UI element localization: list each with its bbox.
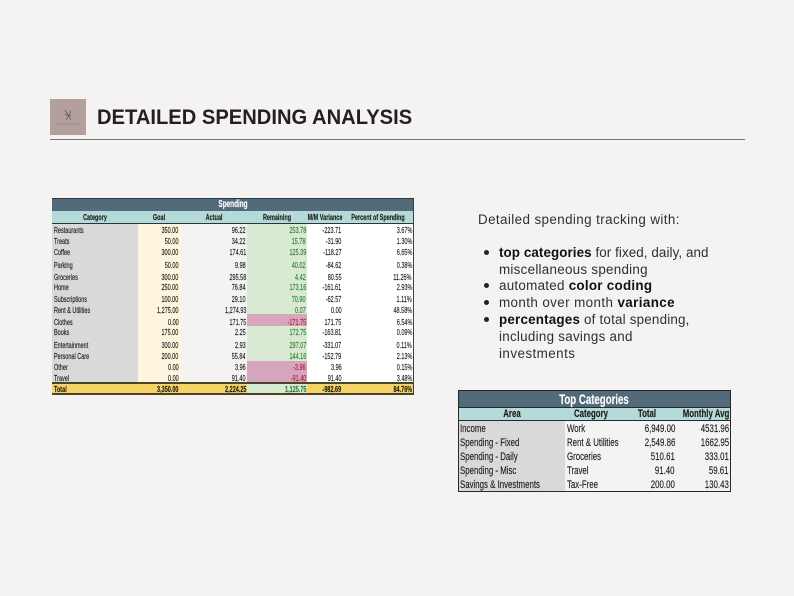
rows: 1662.95: [701, 437, 729, 449]
bullet list: top categories for fixed, daily, and: [499, 245, 709, 260]
bullet list: miscellaneous spending: [499, 262, 648, 277]
rows: Tax-Free: [567, 479, 598, 491]
column fills: [52, 223, 414, 383]
table title bar: Top Categories: [559, 391, 629, 407]
bullet list: investments: [499, 346, 575, 361]
rows: 253.78: [289, 225, 306, 235]
table title bar: [458, 390, 731, 408]
bullet list: percentages of total spending,: [499, 312, 690, 327]
rows: 250.00: [162, 282, 178, 292]
rows: -118.27: [323, 247, 342, 257]
panel: top categories table: [458, 390, 731, 492]
column headers: Total: [638, 408, 656, 420]
rows: 1.30%: [396, 236, 412, 246]
intro sentence: Detailed spending tracking with:: [478, 212, 680, 227]
rows: 48.58%: [393, 305, 412, 315]
total row: [52, 382, 414, 395]
rows: -62.57: [326, 294, 342, 304]
rows: 100.00: [162, 294, 178, 304]
rows: 29.10: [232, 294, 246, 304]
rows: 297.07: [289, 340, 306, 350]
rows: Clothes: [54, 316, 73, 326]
column headers: Percent of Spending: [351, 212, 405, 222]
rows: 4531.96: [701, 423, 729, 435]
rows: -163.81: [323, 327, 342, 337]
rows: 91.40: [328, 373, 342, 383]
rows: Work: [567, 423, 585, 435]
rows: -161.61: [323, 282, 342, 292]
rows: 4.42: [295, 272, 306, 282]
rows: 91.40: [655, 465, 675, 477]
rows: 0.07: [295, 305, 306, 315]
column headers: M/M Variance: [308, 212, 342, 222]
rows: 130.43: [705, 479, 729, 491]
rows: [54, 225, 412, 383]
rows: 3.67%: [396, 225, 412, 235]
rows: -3.96: [293, 362, 306, 372]
rows: 0.11%: [397, 340, 412, 350]
column headers: Monthly Avg: [683, 408, 729, 420]
panel: spending table: [52, 198, 414, 395]
rows: Other: [54, 362, 68, 372]
bullet list: month over month variance: [499, 295, 675, 310]
rows: 2.93: [235, 340, 246, 350]
rows: -171.75: [287, 316, 306, 326]
rows: Savings & Investments: [460, 479, 540, 491]
rows: Parking: [54, 260, 73, 270]
rows: Books: [54, 327, 69, 337]
rows: 350.00: [162, 225, 178, 235]
column headers: Category: [83, 212, 107, 222]
column headers: Area: [503, 408, 521, 420]
rows: -223.71: [323, 225, 342, 235]
rows: 0.15%: [396, 362, 412, 372]
column headers: [458, 408, 731, 421]
rows: 0.00: [331, 305, 342, 315]
rows: 2.13%: [396, 351, 412, 361]
rows: 6,949.00: [644, 423, 675, 435]
total row: 84.76%: [393, 384, 412, 394]
total row: 1,125.75: [285, 384, 306, 394]
rows: Groceries: [54, 272, 78, 282]
rows: 300.00: [162, 272, 178, 282]
rows: 40.02: [292, 260, 306, 270]
rows: 144.16: [289, 351, 306, 361]
rows: Groceries: [567, 451, 601, 463]
rows: 3.48%: [396, 373, 412, 383]
rows: -331.07: [323, 340, 342, 350]
rows: 6.54%: [396, 316, 412, 326]
table title bar: [52, 198, 414, 211]
column headers: Category: [574, 408, 608, 420]
bullet list: including savings and: [499, 329, 633, 344]
rows: 0.09%: [396, 327, 412, 337]
logo: [50, 99, 86, 135]
rows: 300.00: [162, 340, 178, 350]
rows: Treats: [54, 236, 69, 246]
rows: 50.00: [165, 260, 178, 270]
rows: 96.22: [232, 225, 246, 235]
rows: Travel: [567, 465, 589, 477]
rows: 2,549.86: [644, 437, 675, 449]
area column fill: [459, 421, 565, 491]
bullet list: [484, 245, 709, 361]
rows: 172.75: [289, 327, 306, 337]
rows: 174.61: [229, 247, 246, 257]
rows: [460, 423, 729, 491]
rows: 91.40: [232, 373, 246, 383]
rows: Home: [54, 282, 69, 292]
rows: 200.00: [162, 351, 178, 361]
rows: -84.62: [326, 260, 342, 270]
table title bar: Spending: [218, 199, 248, 210]
rows: 15.78: [292, 236, 306, 246]
rows: 50.00: [165, 236, 178, 246]
column headers: Remaining: [263, 212, 291, 222]
rows: Rent & Utilities: [567, 437, 619, 449]
rows: -31.90: [326, 236, 342, 246]
total row: 3,350.00: [157, 384, 178, 394]
rows: 0.38%: [396, 260, 412, 270]
title rule: [50, 139, 745, 140]
column headers: [52, 211, 414, 224]
total row: 2,224.25: [225, 384, 246, 394]
rows: Rent & Utilities: [54, 305, 90, 315]
column headers: Actual: [206, 212, 222, 222]
rows: Entertainment: [54, 340, 88, 350]
rows: 1.11%: [397, 294, 412, 304]
rows: Spending - Fixed: [460, 437, 519, 449]
rows: 300.00: [162, 247, 178, 257]
rows: 6.65%: [396, 247, 412, 257]
rows: 34.22: [232, 236, 246, 246]
rows: 173.16: [289, 282, 306, 292]
rows: 175.00: [162, 327, 178, 337]
rows: 1,275.00: [157, 305, 178, 315]
rows: 9.98: [235, 260, 246, 270]
rows: 171.75: [325, 316, 342, 326]
total row: -982.69: [323, 384, 342, 394]
rows: 125.39: [289, 247, 306, 257]
table right border: [413, 198, 414, 395]
bullet list: automated color coding: [499, 278, 652, 293]
rows: -91.40: [290, 373, 306, 383]
rows: 333.01: [705, 451, 729, 463]
total row: Total: [54, 384, 67, 394]
column headers: Goal: [153, 212, 165, 222]
rows: 200.00: [651, 479, 675, 491]
rows: 80.55: [328, 272, 342, 282]
title: DETAILED SPENDING ANALYSIS: [97, 106, 412, 129]
rows: 171.75: [229, 316, 246, 326]
rows: 2.93%: [396, 282, 412, 292]
text block: description: [478, 212, 709, 361]
rows: Personal Care: [54, 351, 89, 361]
rows: 3.96: [235, 362, 246, 372]
rows: Spending - Daily: [460, 451, 518, 463]
rows: Coffee: [54, 247, 70, 257]
rows: 59.61: [709, 465, 729, 477]
rows: 2.25: [235, 327, 246, 337]
rows: 0.00: [168, 362, 178, 372]
rows: 510.61: [651, 451, 675, 463]
rows: Travel: [54, 373, 69, 383]
rows: -152.79: [323, 351, 342, 361]
rows: 11.26%: [394, 272, 412, 282]
rows: 76.84: [232, 282, 246, 292]
rows: 295.58: [229, 272, 246, 282]
rows: Spending - Misc: [460, 465, 516, 477]
rows: Restaurants: [54, 225, 84, 235]
rows: 1,274.93: [225, 305, 246, 315]
logo mark: [57, 110, 79, 124]
rows: 3.96: [331, 362, 342, 372]
rows: 0.00: [168, 316, 178, 326]
rows: 70.90: [292, 294, 306, 304]
rows: 0.00: [168, 373, 178, 383]
rows: Subscriptions: [54, 294, 87, 304]
rows: Income: [460, 423, 486, 435]
rows: 55.84: [232, 351, 246, 361]
